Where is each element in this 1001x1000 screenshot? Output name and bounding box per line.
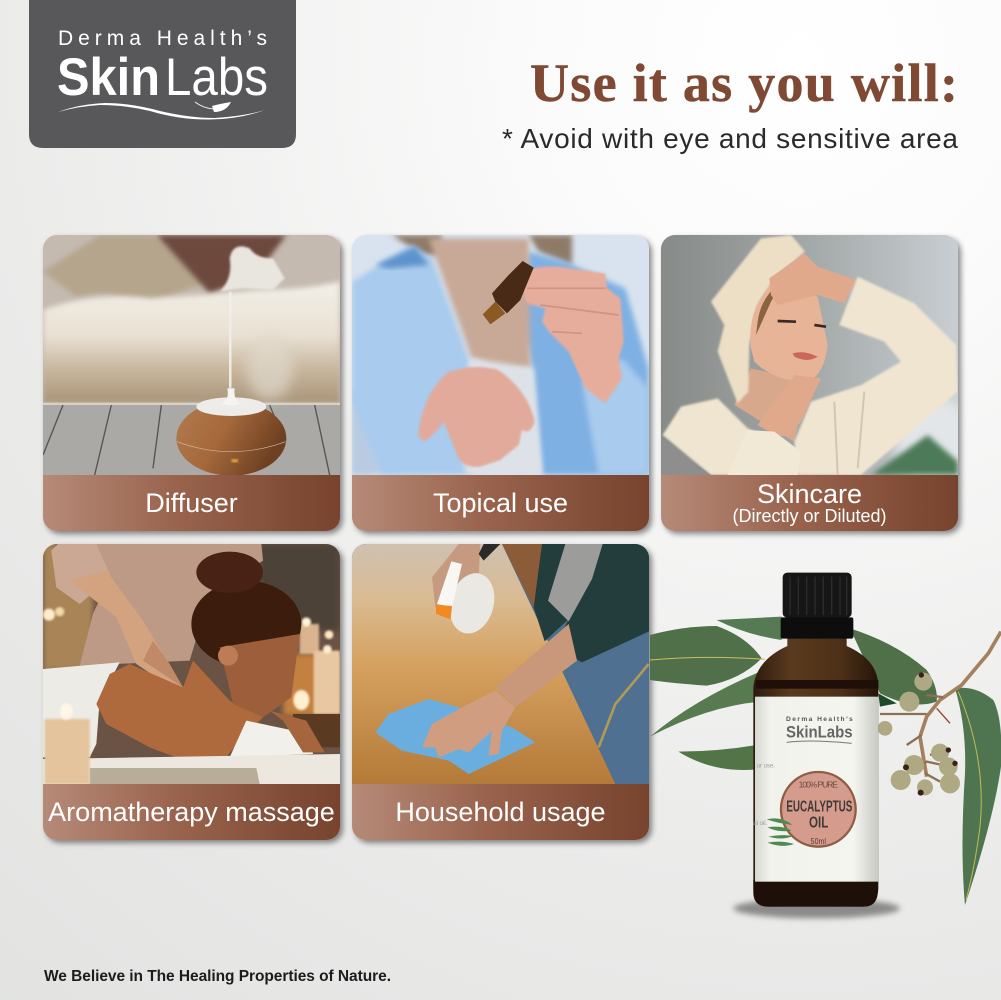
label	[43, 475, 340, 531]
photo: massage with candles	[43, 544, 340, 784]
logo panel: Derma Health’s	[58, 27, 267, 50]
panel: skincare	[661, 235, 974, 531]
bottle label: Derma Health’s	[786, 716, 853, 723]
bottle label: 100% PURE	[799, 779, 838, 789]
label: Topical use	[433, 488, 568, 518]
photo: cleaning a wooden table	[352, 544, 649, 784]
label	[661, 475, 958, 531]
bottle label: OIL	[809, 814, 828, 831]
photo: hands with dropper bottle	[352, 235, 649, 475]
label: (Directly or Diluted)	[732, 506, 886, 526]
label	[43, 784, 340, 840]
bottle label: al oil.	[753, 821, 768, 827]
label: Household usage	[395, 797, 606, 827]
label: Skincare	[757, 479, 862, 509]
photo: diffuser on a wooden table	[43, 235, 340, 476]
panel: aromatherapy massage	[43, 544, 340, 840]
bottle label: EUCALYPTUS	[786, 799, 852, 816]
icon: eucalyptus leaves	[650, 617, 1001, 905]
bottle glass	[753, 638, 878, 907]
bottle label	[753, 697, 878, 882]
title: Use it as you will:	[530, 53, 958, 113]
label	[352, 475, 649, 531]
bottle label: SkinLabs	[786, 722, 853, 741]
bottle label: ur use.	[757, 763, 775, 769]
panel: topical use	[352, 235, 649, 531]
bottle label: 50ml	[811, 837, 826, 846]
photo: woman with towel and bathrobe	[661, 235, 974, 488]
label: Aromatherapy massage	[48, 797, 335, 827]
bottle shadow	[733, 898, 900, 918]
logo panel	[29, 0, 296, 148]
subtitle: * Avoid with eye and sensitive area	[502, 123, 958, 154]
label: Diffuser	[145, 488, 238, 518]
label	[352, 784, 649, 840]
logo panel: Labs	[165, 48, 268, 107]
panel: diffuser	[43, 235, 340, 531]
panel: household usage	[352, 544, 649, 840]
product: eucalyptus oil bottle with leaves	[650, 573, 1001, 918]
logo panel: Skin	[57, 48, 160, 107]
tagline: We Believe in The Healing Properties of Nature.	[44, 968, 391, 985]
bottle cap	[781, 573, 853, 639]
